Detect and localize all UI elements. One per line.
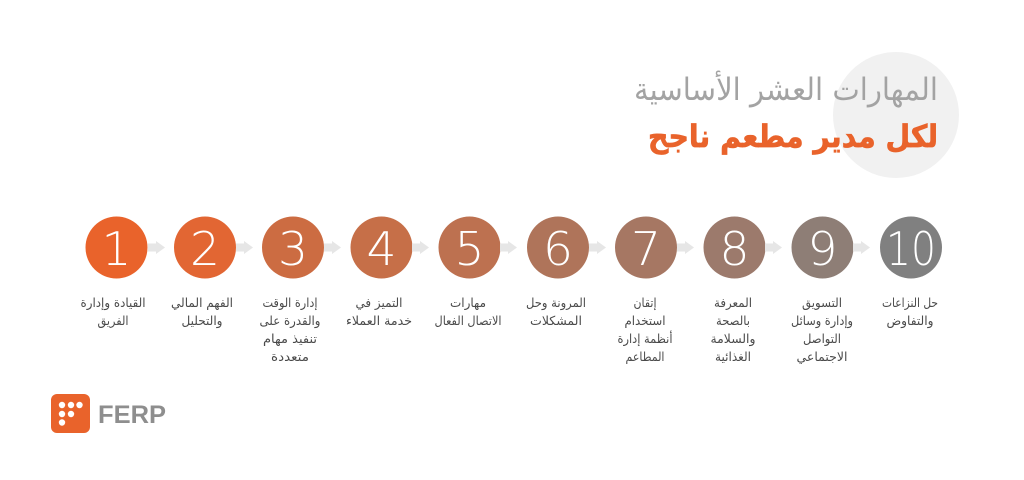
- step 7: المطاعم: [626, 349, 664, 365]
- step 9: التواصل: [803, 331, 841, 347]
- logo icon: [51, 394, 90, 433]
- step 2: الفهم المالي: [171, 295, 233, 311]
- step 8: المعرفة: [714, 295, 752, 311]
- arrow 2: [236, 241, 253, 254]
- step 8: 8: [720, 222, 750, 276]
- title line 1: المهارات العشر الأساسية: [634, 70, 938, 108]
- step 8: والسلامة: [710, 331, 756, 347]
- step 10: 10: [886, 222, 936, 276]
- step 2: 2: [190, 222, 220, 276]
- step 6: [526, 216, 589, 328]
- step 10: حل النزاعات: [882, 295, 938, 311]
- arrow 4: [412, 241, 429, 254]
- step 2: والتحليل: [182, 313, 222, 329]
- step 8: بالصحة: [716, 313, 750, 328]
- step 6: المرونة وحل: [526, 295, 586, 311]
- step 9: الاجتماعي: [796, 349, 848, 364]
- step 5: الاتصال الفعال: [434, 313, 502, 328]
- step 1: 1: [102, 222, 132, 276]
- step 7: 7: [631, 222, 661, 276]
- step 9: [791, 216, 854, 364]
- arrow 3: [324, 241, 341, 254]
- step 2: [171, 216, 236, 329]
- step 8: الغذائية: [715, 349, 751, 364]
- step 7: استخدام: [624, 313, 666, 328]
- step 10: والتفاوض: [886, 313, 934, 329]
- title block: [634, 52, 959, 178]
- step 4: 4: [366, 222, 396, 276]
- step 9: 9: [808, 222, 838, 276]
- step 7: أنظمة إدارة: [618, 330, 672, 347]
- step 5: مهارات: [450, 295, 486, 311]
- title background circle: [833, 52, 959, 178]
- arrow 6: [589, 241, 606, 254]
- step 7: إتقان: [634, 295, 656, 310]
- step 9: وإدارة وسائل: [791, 313, 853, 329]
- step 1: القيادة وإدارة: [80, 295, 146, 311]
- step 3: تنفيذ مهام: [263, 331, 318, 347]
- step 6: المشكلات: [530, 313, 582, 328]
- step 3: إدارة الوقت: [262, 295, 318, 311]
- step 9: التسويق: [802, 295, 842, 311]
- step 3: [260, 216, 324, 364]
- arrow 5: [500, 241, 517, 254]
- step 1: الفريق: [98, 313, 128, 329]
- arrow 9: [853, 241, 870, 254]
- step 3: والقدرة على: [260, 313, 320, 329]
- step 4: خدمة العملاء: [346, 313, 412, 328]
- logo wordmark: FERP: [98, 401, 166, 429]
- step 1: [80, 216, 148, 329]
- step 4: التميز في: [356, 295, 402, 311]
- step 5: 5: [454, 222, 484, 276]
- step 6: 6: [543, 222, 573, 276]
- step 8: [704, 216, 766, 364]
- step 5: [434, 216, 502, 328]
- step 10: [880, 216, 942, 329]
- step 7: [615, 216, 677, 365]
- arrow 7: [677, 241, 694, 254]
- arrow 8: [765, 241, 782, 254]
- title line 2: لكل مدير مطعم ناجح: [648, 119, 938, 155]
- logo: [51, 394, 166, 433]
- step 3: متعددة: [271, 349, 309, 364]
- arrow 1: [148, 241, 165, 254]
- step 4: [346, 216, 412, 328]
- step 3: 3: [278, 222, 308, 276]
